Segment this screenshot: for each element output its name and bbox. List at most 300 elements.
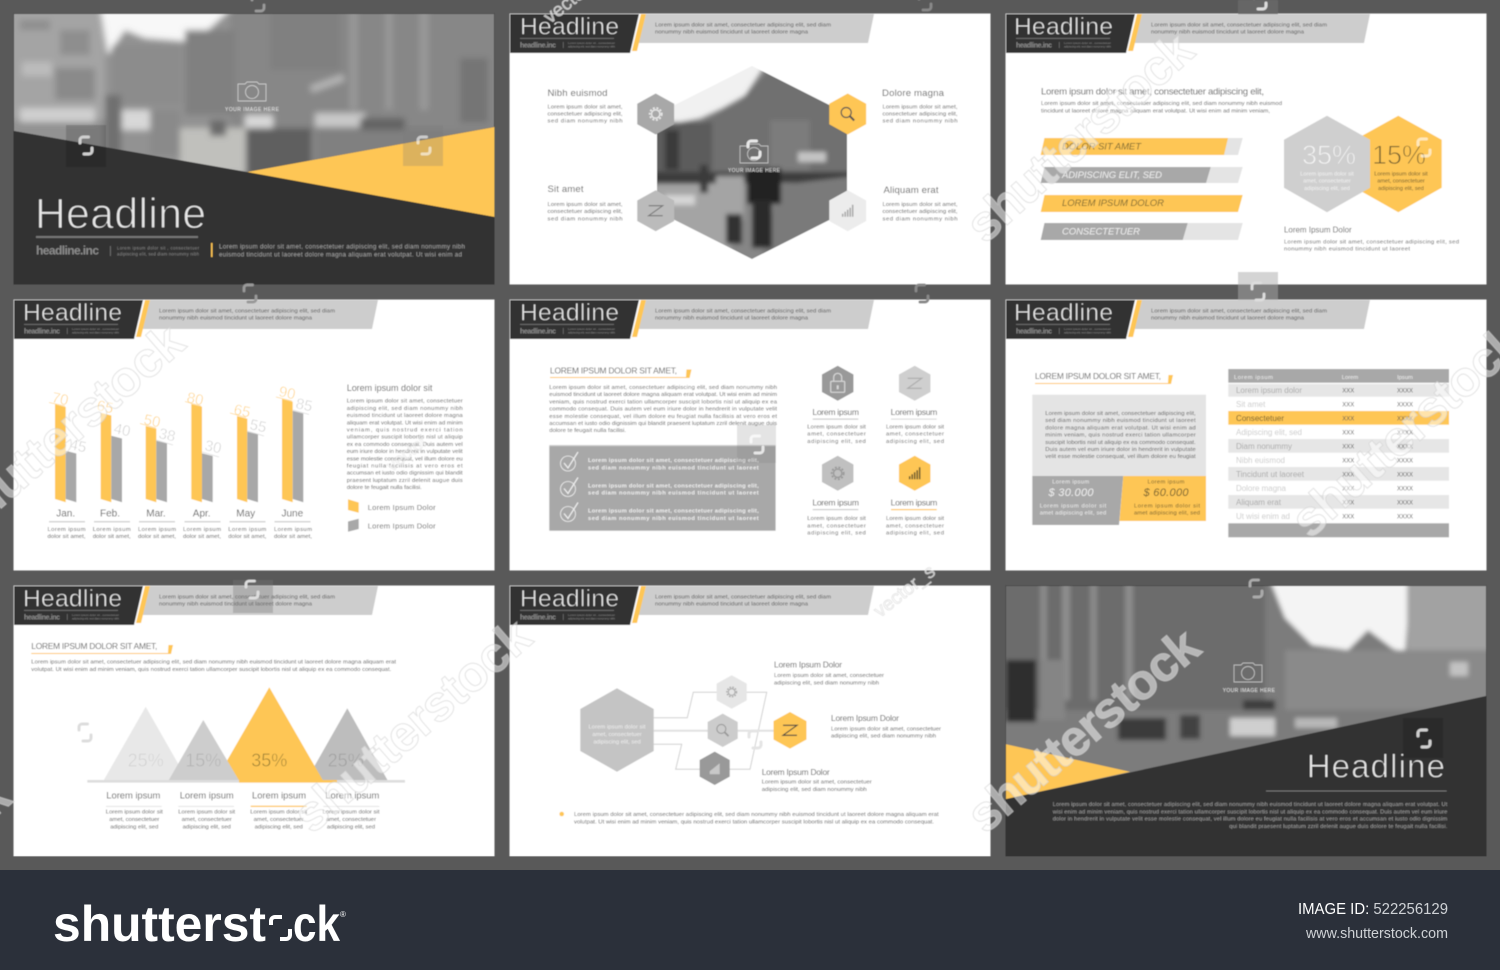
- header: nonummy nibh euismod tincidunt ut laoreet dolore magna: [655, 602, 809, 608]
- percent labels: [128, 751, 364, 771]
- grey text panel: Lorem ipsum dolor sit amet, consectetuer adipiscing elit,: [1045, 411, 1196, 417]
- note 3: Lorem Ipsum Dolor: [762, 767, 830, 777]
- month captions: Lorem ipsum: [183, 527, 221, 533]
- header: Lorem ipsum dolor sit amet, consectetuer adipiscing elit, sed diam: [159, 308, 335, 314]
- slide 3: progress bars and percent hexagons: [1006, 14, 1486, 284]
- icon: bars hexagon: [829, 190, 866, 231]
- note: Nibh euismod: sed diam nonummy nibh: [548, 119, 622, 125]
- month captions: Lorem ipsum: [274, 527, 312, 533]
- connector lines: [654, 692, 775, 769]
- caption 4: Lorem ipsum: [325, 789, 379, 800]
- side text: eum iriure dolor in hendrerit in vulputate velit: [347, 449, 463, 455]
- caption 4: adipiscing elit, sed: [327, 824, 375, 830]
- percent labels: 35%: [251, 751, 287, 771]
- header: [14, 586, 378, 625]
- side text: adipiscing elit, sed diam nonummy nibh: [347, 406, 463, 412]
- grey text panel: velit esse molestie consequat, vel illum dolore eu feugiat: [1045, 454, 1196, 460]
- paragraph: euismod tincidunt ut laoreet dolore magna aliquam erat volutpat. Ut wisi enim ad minim: [549, 392, 777, 398]
- header: Lorem ipsum dolor sit amet, consectetuer adipiscing elit, sed diam: [1151, 308, 1327, 314]
- row labels: Lorem ipsum dolor: [1236, 386, 1302, 395]
- month captions: dolor sit amet,: [274, 534, 312, 540]
- yellow wedge: [1006, 744, 1130, 799]
- site url: www.shutterstock.com: [1305, 926, 1448, 942]
- icon: share hexagon: [637, 190, 674, 231]
- slide 9: closing cover: [1000, 580, 1495, 856]
- header: nonummy nibh euismod tincidunt ut laoreet dolore magna: [159, 602, 313, 608]
- note 2: Lorem Ipsum Dolor: [831, 713, 899, 723]
- note: Aliquam erat: [882, 185, 958, 222]
- caption 2: adipiscing elit, sed: [183, 824, 231, 830]
- caption 4: [322, 789, 380, 830]
- grid item text 3: [807, 498, 866, 537]
- icon: lock hexagon: [822, 366, 853, 401]
- header: nonummy nibh euismod tincidunt ut laoreet dolore magna: [655, 30, 809, 36]
- note: Dolore magna: [882, 88, 958, 125]
- grid item text 4: Lorem ipsum: [891, 498, 937, 508]
- check text: sed diam nonummy nibh euismod tincidunt ut laoreet: [588, 465, 759, 471]
- footnote: [559, 812, 939, 825]
- percent labels: 25%: [328, 751, 364, 771]
- note under hexagons: nonummy nibh euismod tincidunt ut laoreet: [1284, 246, 1410, 252]
- note under hexagons: Lorem Ipsum Dolor: [1284, 226, 1352, 235]
- caption 2: Lorem ipsum dolor sit: [178, 810, 236, 816]
- grid item text 1: Lorem ipsum: [812, 407, 859, 417]
- note 1: [774, 660, 884, 686]
- caption 1: Lorem ipsum dolor sit: [106, 810, 163, 816]
- header: nonummy nibh euismod tincidunt ut laoreet dolore magna: [1151, 316, 1305, 322]
- column values: XXX: [1342, 444, 1354, 450]
- month labels: Feb.: [100, 509, 120, 520]
- triangle 25% light: [103, 707, 188, 781]
- icon: magnifier hexagon: [708, 714, 738, 747]
- note 2: adipiscing elit, sed diam nonummy nibh: [831, 734, 936, 740]
- row labels: Dolore magna: [1236, 484, 1287, 493]
- percent labels: 15%: [185, 751, 221, 771]
- grid item text 3: adipiscing elit, sed: [807, 531, 866, 537]
- grey text panel: sed diam nonummy nibh euismod tincidunt ut laoreet: [1045, 418, 1196, 424]
- header: Headline: [520, 300, 619, 326]
- month labels: Jan.: [56, 509, 75, 520]
- watermark brackets: [66, 0, 1443, 758]
- side text: ex ea commodo consequat. Duis autem vel: [347, 442, 463, 448]
- note: Aliquam erat: sed diam nonummy nibh: [882, 216, 958, 222]
- table header: Lorem: [1342, 375, 1358, 381]
- grey text panel: Duis autem vel eum iriure dolor in hendrerit in vulputate: [1045, 447, 1196, 453]
- note: Sit amet: sed diam nonummy nibh: [548, 216, 622, 222]
- closing text: dolor in hendrerit in vulputate velit esse molestie consequat, vel illum dolore eu feugiat nulla facilisis at vero eros et accumsan et iusto odio dignissim: [1053, 816, 1448, 822]
- month captions: dolor sit amet,: [183, 534, 221, 540]
- Jan bars: [49, 389, 88, 502]
- header: Lorem ipsum dolor sit , consectetuer: [568, 327, 615, 331]
- shutterstock watermarks: shutterstock: [282, 607, 542, 843]
- slide 1: cover: [0, 0, 510, 284]
- note: Nibh euismod: consectetuer adipiscing elit,: [548, 112, 623, 118]
- chart legend: [348, 499, 436, 532]
- brand tagline: [117, 246, 200, 256]
- grey text panel: dolore magna aliquam erat volutpat. Ut wisi enim ad: [1045, 425, 1196, 431]
- side text: dolore te feugait nulla facilisi.: [347, 485, 422, 491]
- data table: [1228, 369, 1449, 537]
- header: [1006, 14, 1370, 53]
- caption 1: amet, consectetuer: [109, 817, 159, 823]
- price: $ 30.000: $ 30.000: [1048, 487, 1094, 499]
- caption 2: Lorem ipsum: [180, 789, 234, 800]
- side text: veniam, quis nostrud exerci tation: [347, 428, 463, 434]
- column values: XXX: [1342, 514, 1354, 520]
- check text: Lorem ipsum dolor sit amet, consectetuer adipiscing elit,: [588, 509, 759, 515]
- header: [14, 300, 378, 339]
- header: headline.inc: [24, 615, 60, 622]
- header: headline.inc: [24, 329, 60, 336]
- Mar bars: 38: [157, 425, 177, 445]
- header: Lorem ipsum dolor sit amet, consectetuer adipiscing elit, sed diam: [159, 594, 335, 600]
- header: Lorem ipsum dolor sit , consectetuer: [1064, 41, 1111, 45]
- note: Aliquam erat: Aliquam erat: [884, 185, 939, 196]
- hexagon: 15%: [1355, 116, 1442, 212]
- row labels: Tincidunt ut laoreet: [1236, 470, 1305, 479]
- header: adipiscing elit, sed diam nonummy nibh: [568, 616, 615, 620]
- Feb bars: 65: [95, 397, 115, 417]
- table header: Lorem ipsum: [1234, 375, 1273, 381]
- grey text panel: minim veniam, quis nostrud exerci tation ullamcorper: [1045, 433, 1196, 439]
- closing text: [1052, 802, 1448, 830]
- header: Headline: [1014, 300, 1113, 326]
- caption 1: adipiscing elit, sed: [110, 824, 158, 830]
- section heading: [31, 641, 173, 654]
- icon: bars hexagon: [899, 456, 930, 491]
- grid item text 1: adipiscing elit, sed: [807, 439, 866, 445]
- column values: XXX: [1342, 472, 1354, 478]
- check items: [560, 452, 578, 522]
- price: $ 30.000: Lorem ipsum: [1052, 480, 1089, 486]
- caption 1: [106, 789, 163, 830]
- column values: XXX: [1342, 458, 1354, 464]
- column values: XXXX: [1397, 458, 1413, 464]
- headline rule: [1266, 790, 1447, 792]
- grid item text 2: [886, 407, 944, 445]
- grid item text 1: amet, consectetuer: [807, 432, 866, 438]
- hexagon: 35%: 35%: [1302, 140, 1356, 170]
- note 3: [762, 767, 872, 793]
- intro text: Lorem ipsum dolor sit amet, consectetuer adipiscing elit,: [1041, 86, 1264, 97]
- caption 3: [250, 789, 308, 830]
- vector watermarks: [383, 0, 940, 622]
- header: [510, 14, 874, 53]
- section heading: LOREM IPSUM DOLOR SIT AMET,: [1035, 371, 1161, 381]
- section heading: LOREM IPSUM DOLOR SIT AMET,: [31, 641, 157, 651]
- header: nonummy nibh euismod tincidunt ut laoreet dolore magna: [1151, 30, 1305, 36]
- grid item text 2: Lorem ipsum: [891, 407, 937, 417]
- header: Lorem ipsum dolor sit , consectetuer: [72, 327, 119, 331]
- side text: praesent luptatum zzril delenit augue duis: [347, 478, 463, 484]
- header: Lorem ipsum dolor sit , consectetuer: [568, 613, 615, 617]
- column values: XXXX: [1397, 430, 1413, 436]
- month captions: dolor sit amet,: [93, 534, 131, 540]
- month captions: [48, 527, 312, 540]
- hexagon: 15%: adipiscing elit, sed: [1378, 186, 1424, 192]
- month captions: Lorem ipsum: [48, 527, 86, 533]
- shutterstock logo: ck: [293, 896, 340, 952]
- grid item text 2: Lorem ipsum dolor sit: [886, 424, 944, 430]
- hexagon photo: [656, 66, 848, 260]
- grid item text 3: Lorem ipsum dolor sit: [807, 516, 866, 522]
- main hexagon: amet, consectetuer: [592, 732, 642, 738]
- note: Aliquam erat: consectetuer adipiscing elit,: [882, 209, 958, 215]
- header: Lorem ipsum dolor sit amet, consectetuer adipiscing elit, sed diam: [655, 308, 831, 314]
- header: headline.inc: [520, 43, 556, 50]
- header: Headline: [23, 300, 122, 326]
- note under hexagons: Lorem ipsum dolor sit amet, consectetuer adipiscing elit, sed: [1284, 239, 1459, 245]
- header: Headline: [1014, 14, 1113, 40]
- column values: XXXX: [1397, 388, 1413, 394]
- shutterstock watermarks: shutterstock: [955, 21, 1204, 253]
- price: $ 30.000: [1032, 476, 1123, 525]
- grid item text 2: amet, consectetuer: [886, 432, 944, 438]
- footnote: volutpat. Ut wisi enim ad minim veniam, quis nostrud exerci tation ullamcorper suscipit lobortis nisl ut aliquip ex ea commodo consequat.: [574, 819, 934, 825]
- intro text: [31, 660, 396, 673]
- caption 3: Lorem ipsum dolor sit: [250, 810, 308, 816]
- icon: share hexagon: [774, 712, 806, 749]
- icon: gear hexagon: [637, 94, 674, 134]
- slide 8: hexagon flow: [510, 586, 990, 856]
- main hexagon: [580, 688, 654, 772]
- month rules: [49, 521, 310, 522]
- check text: [588, 458, 759, 522]
- price: $ 30.000: amet adipiscing elit, sed: [1040, 511, 1106, 517]
- closing text: Lorem ipsum dolor sit amet, consectetuer adipiscing elit, sed diam nonummy nibh euismod tincidunt ut laoreet dolore magna aliquam erat volutpat. Ut: [1053, 802, 1448, 808]
- check text: sed diam nonummy nibh euismod tincidunt ut laoreet: [588, 516, 759, 522]
- bar: LOREM IPSUM DOLOR: [1041, 195, 1243, 212]
- camera placeholder: [728, 144, 781, 174]
- column values: XXX: [1342, 486, 1354, 492]
- note: Aliquam erat: Lorem ipsum dolor sit amet,: [882, 202, 958, 208]
- header: Lorem ipsum dolor sit , consectetuer: [568, 41, 615, 45]
- cover text: euismod tincidunt ut laoreet dolore magna aliquam erat volutpat. Ut wisi enim ad: [219, 252, 463, 258]
- caption 3: amet, consectetuer: [254, 817, 304, 823]
- check text: Lorem ipsum dolor sit amet, consectetuer adipiscing elit,: [588, 458, 759, 464]
- main hexagon: adipiscing elit, sed: [593, 739, 641, 745]
- side text: accumsan et iusto odio dignissim qui blandit: [347, 471, 463, 477]
- column values: XXX: [1342, 430, 1354, 436]
- icon: magnifier hexagon: [829, 94, 866, 134]
- header: nonummy nibh euismod tincidunt ut laoreet dolore magna: [655, 316, 809, 322]
- price: $ 60.000: Lorem ipsum dolor sit: [1134, 503, 1200, 509]
- caption 3: Lorem ipsum: [252, 789, 306, 800]
- camera placeholder: YOUR IMAGE HERE: [728, 168, 781, 174]
- June bars: [276, 383, 314, 502]
- hexagon: 35%: Lorem ipsum dolor sit: [1300, 171, 1354, 177]
- cover headline: Headline: [35, 191, 206, 238]
- month captions: Lorem ipsum: [138, 527, 176, 533]
- header: Lorem ipsum dolor sit amet, consectetuer adipiscing elit, sed diam: [655, 594, 831, 600]
- intro text: Lorem ipsum dolor sit amet, consectetuer adipiscing elit, sed diam nonummy nibh euismod: [1041, 101, 1282, 107]
- header: adipiscing elit, sed diam nonummy nibh: [568, 330, 615, 334]
- row labels: Nibh euismod: [1236, 456, 1285, 465]
- header: adipiscing elit, sed diam nonummy nibh: [72, 616, 119, 620]
- camera placeholder: [1223, 663, 1276, 694]
- side text: Lorem ipsum dolor sit amet, consectetuer: [347, 399, 463, 405]
- note: Sit amet: Sit amet: [548, 184, 584, 195]
- note 1: adipiscing elit, sed diam nonummy nibh: [774, 680, 879, 686]
- grid item text 2: adipiscing elit, sed: [886, 439, 944, 445]
- header: Headline: [520, 586, 619, 612]
- Mar bars: [140, 411, 177, 502]
- header: [510, 586, 874, 625]
- chart legend: Lorem Ipsum Dolor: [368, 522, 436, 531]
- Feb bars: [95, 397, 132, 502]
- header: Lorem ipsum dolor sit amet, consectetuer adipiscing elit, sed diam: [655, 22, 831, 28]
- percent labels: 25%: [128, 751, 164, 771]
- row labels: Consectetuer: [1236, 414, 1284, 423]
- closing text: qui blandit praesent luptatum zzril delenit augue duis dolore te feugait nulla facilisi.: [1229, 824, 1448, 830]
- intro text: Lorem ipsum dolor sit amet, consectetuer adipiscing elit, sed diam nonummy nibh euismod tincidunt ut laoreet dolore magna aliquam erat: [31, 660, 396, 666]
- row labels: Sit amet: [1236, 400, 1266, 409]
- caption 2: [178, 789, 236, 830]
- side text: ullamcorper suscipit lobortis nisl ut aliquip: [347, 435, 463, 441]
- intro text: tincidunt ut laoreet dolore magna aliquam erat volutpat. Ut wisi enim ad minim veniam,: [1041, 109, 1270, 115]
- month captions: dolor sit amet,: [48, 534, 86, 540]
- triangle chart: [87, 687, 405, 783]
- table header: Ipsum: [1397, 375, 1413, 381]
- icon: bars hexagon: [700, 752, 730, 785]
- hexagon: 35%: [1284, 116, 1370, 212]
- column values: XXX: [1342, 388, 1354, 394]
- paragraph: accumsan et iusto odio dignissim qui blandit praesent luptatum zzril delenit augue duis: [549, 421, 777, 427]
- hexagon: 35%: amet, consectetuer: [1303, 179, 1351, 185]
- caption 1: Lorem ipsum: [106, 789, 160, 800]
- section heading: LOREM IPSUM DOLOR SIT AMET,: [550, 365, 677, 375]
- triangle 15% grey: [168, 720, 239, 781]
- month labels: June: [281, 509, 304, 520]
- paragraph: [549, 385, 778, 434]
- column values: XXXX: [1397, 402, 1413, 408]
- yellow wedge: [247, 127, 494, 217]
- grid item text 4: Lorem ipsum dolor sit: [886, 516, 944, 522]
- note: Dolore magna: consectetuer adipiscing elit,: [882, 112, 958, 118]
- Feb bars: 40: [112, 420, 132, 440]
- caption 4: Lorem ipsum dolor sit: [322, 810, 380, 816]
- headline rule: [36, 236, 198, 238]
- Jan bars: 45: [68, 436, 88, 456]
- intro text: [1041, 86, 1282, 115]
- camera placeholder: YOUR IMAGE HERE: [1223, 688, 1276, 694]
- grey text panel: suscipit lobortis nisl ut aliquip ex ea commodo consequat.: [1045, 440, 1196, 446]
- blurred street photo: [1006, 585, 1487, 792]
- note: Nibh euismod: Lorem ipsum dolor sit amet,: [548, 104, 623, 110]
- check list panel: [549, 445, 776, 531]
- header: [1006, 300, 1370, 339]
- triangle 35% yellow: [215, 687, 323, 781]
- column values: XXXX: [1397, 444, 1413, 450]
- header: adipiscing elit, sed diam nonummy nibh: [1064, 330, 1111, 334]
- price: $ 30.000: Lorem ipsum dolor sit: [1040, 503, 1107, 509]
- intro text: volutpat. Ut wisi enim ad minim veniam, quis nostrud exerci tation ullamcorper suscipit lobortis nisl ut aliquip ex ea commodo consequat.: [31, 667, 392, 673]
- note: Sit amet: consectetuer adipiscing elit,: [548, 209, 623, 215]
- slide 2: hexagon with four notes: [510, 14, 990, 284]
- month labels: May: [236, 509, 255, 520]
- row labels: [1236, 386, 1305, 521]
- grid item text 4: amet, consectetuer: [886, 523, 944, 529]
- header: adipiscing elit, sed diam nonummy nibh: [568, 44, 615, 48]
- note: Dolore magna: Lorem ipsum dolor sit amet,: [882, 104, 958, 110]
- slide 7: triangles: [14, 586, 494, 856]
- month labels: [56, 509, 304, 520]
- side text: aliquam erat volutpat. Ut wisi enim ad minim: [347, 420, 463, 426]
- closing headline: Headline: [1307, 747, 1445, 784]
- paragraph: dolore te feugait nulla facilisi.: [549, 428, 626, 434]
- table header: [1234, 375, 1413, 381]
- hexagon: 35%: adipiscing elit, sed: [1304, 186, 1350, 192]
- footnote: Lorem ipsum dolor sit amet, consectetuer adipiscing elit, sed diam nonummy nibh euismod tincidunt ut laoreet dolore magna aliquam erat: [574, 812, 939, 818]
- shutterstock watermarks: shutterstock: [956, 617, 1211, 843]
- header: [510, 300, 874, 339]
- grid item text 4: adipiscing elit, sed: [886, 531, 944, 537]
- June bars: 90: [277, 383, 297, 403]
- caption 3: adipiscing elit, sed: [255, 824, 303, 830]
- blurred street photo: [13, 13, 495, 173]
- side text: [347, 383, 463, 491]
- grid item text 1: [807, 407, 866, 445]
- paragraph: Lorem ipsum dolor sit amet, consectetuer adipiscing elit, sed diam nonummy nibh: [549, 385, 777, 391]
- bar: ADIPISCING ELIT, SED: [1041, 167, 1243, 183]
- baseline: [87, 780, 405, 783]
- price: $ 60.000: Lorem ipsum: [1148, 480, 1185, 486]
- note: Sit amet: [548, 184, 623, 222]
- bar: DOLOR SIT AMET: DOLOR SIT AMET: [1062, 142, 1142, 153]
- Apr bars: 80: [185, 389, 205, 409]
- camera placeholder: YOUR IMAGE HERE: [225, 107, 280, 113]
- header: Lorem ipsum dolor sit , consectetuer: [1064, 327, 1111, 331]
- vector watermarks: vector_s: [870, 561, 940, 622]
- header: Headline: [520, 14, 619, 40]
- row labels: Diam nonummy: [1236, 442, 1292, 451]
- row labels: Adipiscing elit, sed: [1236, 428, 1302, 437]
- side text: euismod tincidunt ut laoreet dolore magna: [347, 413, 463, 419]
- header: adipiscing elit, sed diam nonummy nibh: [1064, 44, 1111, 48]
- note 2: Lorem ipsum dolor sit amet, consectetuer: [831, 726, 941, 732]
- month captions: dolor sit amet,: [228, 534, 267, 540]
- header: Headline: [23, 586, 122, 612]
- check text: sed diam nonummy nibh euismod tincidunt ut laoreet: [588, 491, 759, 497]
- footer bar: [0, 870, 1500, 970]
- bar: LOREM IPSUM DOLOR: LOREM IPSUM DOLOR: [1062, 198, 1164, 209]
- Apr bars: 30: [203, 437, 223, 457]
- Jan bars: 70: [50, 389, 70, 409]
- side text: esse molestie consequat, vel illum dolore eu: [347, 456, 463, 462]
- note under hexagons: [1284, 226, 1459, 252]
- slide 6: pricing and table: [1006, 300, 1486, 570]
- note: Dolore magna: sed diam nonummy nibh: [882, 119, 958, 125]
- closing text: wisi enim ad minim veniam, quis nostrud exerci tation ullamcorper suscipit lobortis nisl ut aliquip ex ea commodo consequat. Duis autem vel eum iriure: [1052, 809, 1447, 815]
- column values: XXX: [1342, 402, 1354, 408]
- bar: DOLOR SIT AMET: [1041, 138, 1243, 155]
- slide 4: bar chart: [14, 300, 494, 570]
- note: Dolore magna: Dolore magna: [882, 88, 945, 99]
- caption 2: amet, consectetuer: [182, 817, 232, 823]
- shutterstock logo: shutterst: [53, 896, 266, 952]
- image id: IMAGE ID: 522256129: [1298, 901, 1448, 918]
- column values: XXX: [1342, 500, 1354, 506]
- paragraph: veniam, quis nostrud exerci tation ullamcorper suscipit lobortis nisl ut aliquip ex ea: [549, 399, 778, 405]
- bar chart: [48, 383, 314, 540]
- check text: Lorem ipsum dolor sit amet, consectetuer adipiscing elit,: [588, 483, 759, 489]
- camera placeholder: [225, 82, 280, 113]
- shutterstock logo: ®: [340, 910, 346, 919]
- note 2: [831, 713, 941, 740]
- Apr bars: [185, 389, 223, 502]
- price: $ 60.000: [1120, 476, 1206, 521]
- cover text: Lorem ipsum dolor sit amet, consectetuer adipiscing elit, sed diam nonummy nibh: [219, 244, 466, 250]
